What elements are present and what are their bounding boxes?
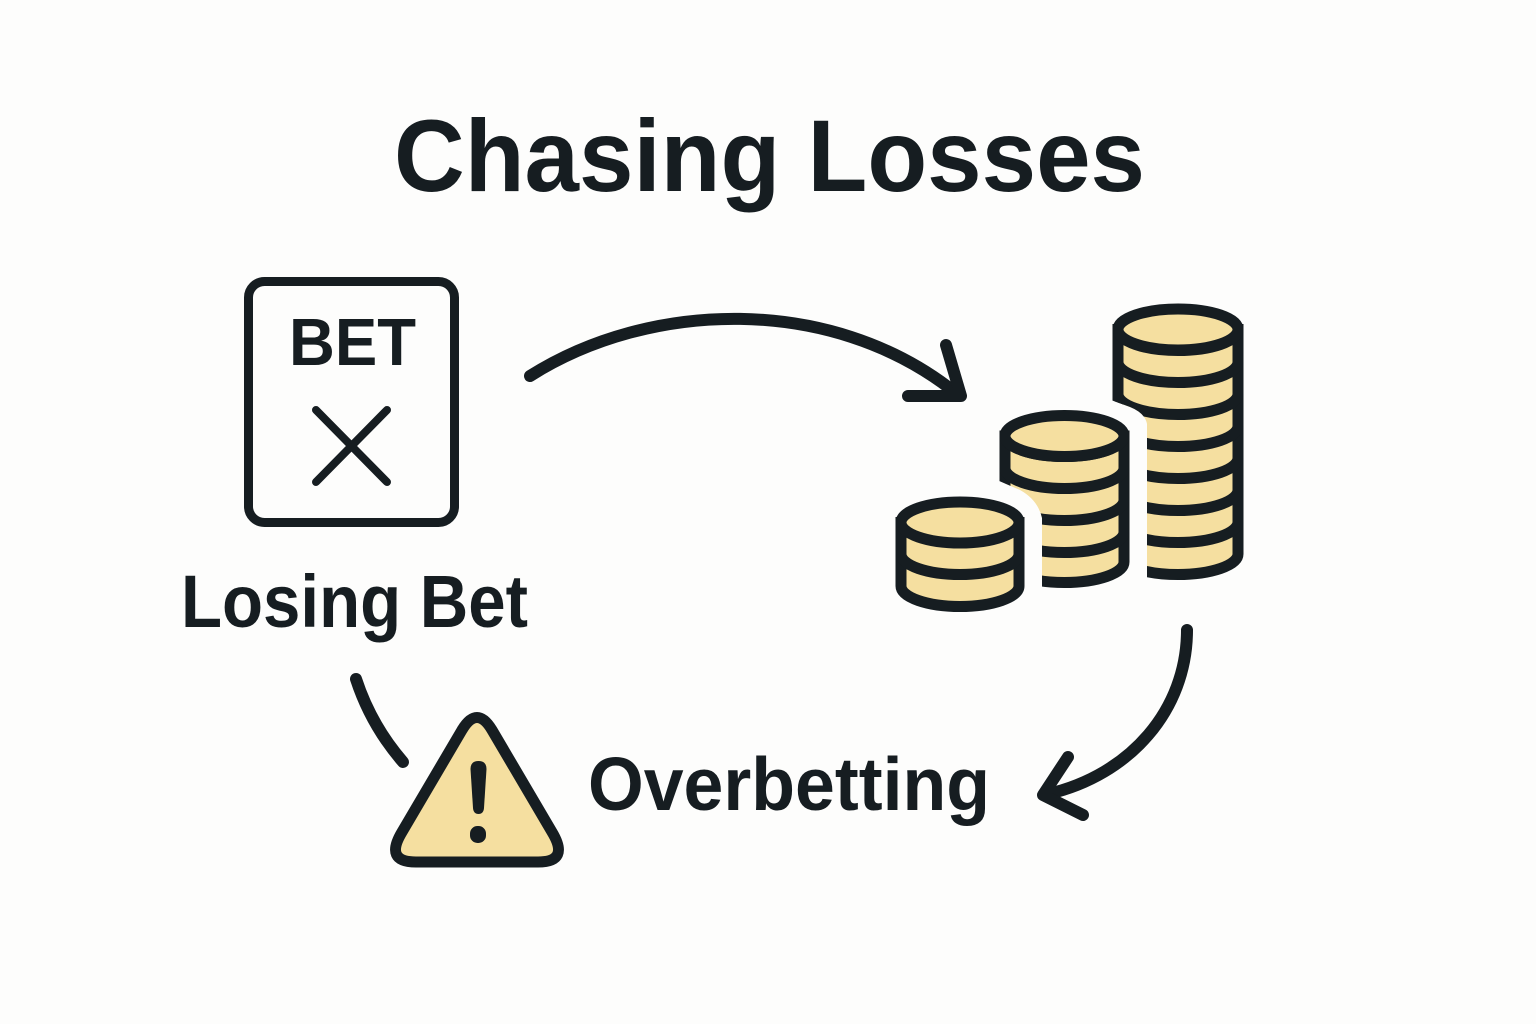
medium coin stack: [1005, 416, 1124, 582]
cross mark: [316, 410, 387, 482]
label: overbetting: Overbetting: [588, 742, 990, 826]
label: losing bet: Losing Bet: [181, 560, 528, 643]
exclamation mark: [470, 761, 486, 814]
arrow: coins to overbetting: [1043, 630, 1187, 815]
icon: warning triangle: [396, 718, 558, 862]
tall coin stack: [1118, 309, 1238, 574]
slip outline: [248, 282, 454, 522]
slip label: BET: [289, 305, 416, 380]
small coin stack: [901, 502, 1019, 606]
triangle: [396, 718, 558, 862]
arrow: bet to coins: [530, 319, 961, 396]
exclamation dot: [470, 826, 486, 843]
icon: coin stacks: [901, 309, 1238, 606]
icon: losing bet slip: [248, 282, 454, 522]
title: Chasing Losses: [394, 99, 1145, 213]
arrow: warning to losing bet: [356, 679, 403, 762]
